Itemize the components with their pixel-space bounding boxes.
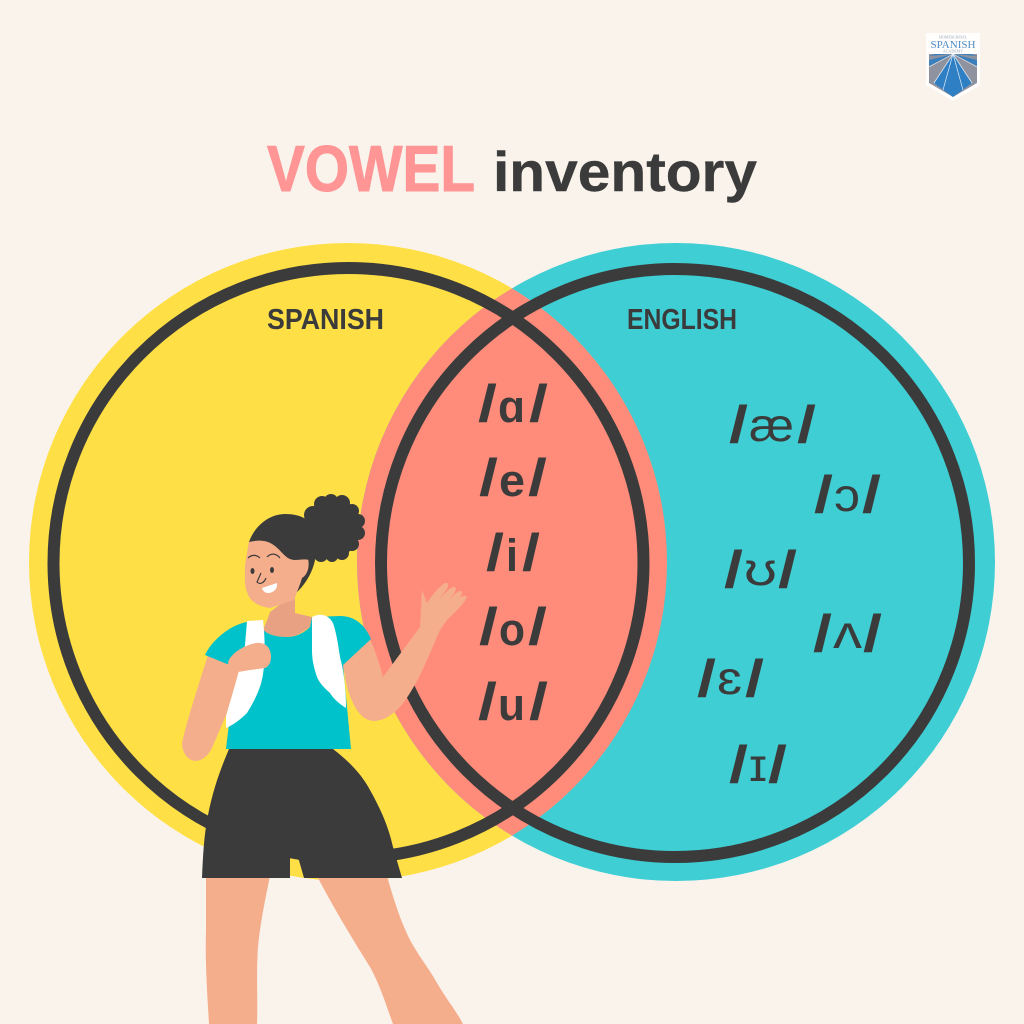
hair strand bbox=[295, 550, 315, 594]
vowel upsilon: ʊ bbox=[744, 543, 777, 595]
vowel wedge bbox=[813, 605, 882, 663]
english vowels bbox=[697, 396, 882, 794]
left arm bbox=[222, 660, 246, 720]
vowel open o: ɔ bbox=[834, 469, 860, 521]
logo: HOMESCHOOL bbox=[939, 34, 967, 40]
vowel small capital i: ɪ bbox=[749, 739, 767, 791]
smile bbox=[262, 583, 277, 593]
vowel i bbox=[486, 524, 540, 582]
vowel u bbox=[478, 673, 548, 731]
vowel small capital i bbox=[729, 736, 787, 794]
vowel u: u bbox=[498, 679, 525, 730]
vowel i: / bbox=[522, 524, 540, 582]
vowel ae bbox=[729, 396, 816, 454]
vowel epsilon: / bbox=[745, 650, 764, 708]
vowel a: ɑ bbox=[498, 381, 525, 432]
label: spanish: SPANISH bbox=[267, 304, 384, 336]
logo: SPANISH bbox=[930, 40, 976, 51]
title bbox=[267, 132, 757, 205]
logo bbox=[926, 33, 980, 101]
eyebrows bbox=[248, 554, 280, 558]
vowel open o: / bbox=[814, 466, 833, 524]
vowel e bbox=[479, 449, 547, 507]
title: VOWEL bbox=[267, 132, 475, 205]
vowel open o bbox=[814, 466, 881, 524]
vowel epsilon: ɛ bbox=[717, 652, 742, 704]
circle: spanish bbox=[29, 243, 667, 881]
right arm bbox=[335, 583, 467, 721]
title: inventory bbox=[493, 140, 757, 203]
vowel a: / bbox=[478, 375, 497, 433]
vowel epsilon bbox=[697, 650, 764, 708]
vowel ae: æ bbox=[749, 399, 794, 451]
vowel o: / bbox=[528, 598, 547, 656]
white straps bbox=[226, 620, 265, 728]
left arm under sleeve bbox=[182, 650, 245, 761]
vowel upsilon: / bbox=[724, 541, 743, 599]
ring: spanish bbox=[54, 268, 644, 858]
shorts bbox=[202, 749, 402, 878]
vowel wedge: / bbox=[863, 605, 882, 663]
logo: ACADEMY bbox=[943, 48, 963, 54]
shirt bbox=[205, 616, 371, 749]
vowel u: / bbox=[478, 673, 497, 731]
shared vowels bbox=[478, 375, 548, 731]
vowel o: o bbox=[499, 604, 525, 655]
vowel upsilon: / bbox=[778, 541, 797, 599]
legs bbox=[206, 876, 270, 1024]
fist bbox=[228, 643, 271, 673]
vowel epsilon: / bbox=[697, 650, 716, 708]
vowel small capital i: / bbox=[729, 736, 748, 794]
vowel i: / bbox=[486, 524, 504, 582]
vowel a: / bbox=[529, 375, 548, 433]
vowel e: / bbox=[528, 449, 547, 507]
vowel upsilon bbox=[724, 541, 797, 599]
vowel o: / bbox=[479, 598, 498, 656]
vowel ae: / bbox=[729, 396, 748, 454]
vowel o bbox=[479, 598, 547, 656]
circle: english bbox=[357, 243, 995, 881]
vowel i: i bbox=[506, 530, 518, 581]
vowel ae: / bbox=[797, 396, 816, 454]
hair bbox=[249, 494, 365, 562]
nose bbox=[257, 573, 266, 583]
vowel wedge: ʌ bbox=[833, 606, 862, 658]
vowel small capital i: / bbox=[768, 736, 787, 794]
vowel e: e bbox=[499, 455, 525, 506]
vowel u: / bbox=[529, 673, 548, 731]
ring: english bbox=[381, 269, 969, 857]
overlap bbox=[357, 288, 667, 836]
vowel wedge: / bbox=[813, 605, 832, 663]
figure: woman bbox=[182, 494, 467, 1024]
neck bbox=[263, 593, 312, 637]
venn diagram bbox=[29, 243, 995, 881]
eyes bbox=[250, 567, 274, 574]
vowel a bbox=[478, 375, 548, 433]
vowel open o: / bbox=[862, 466, 881, 524]
label: english: ENGLISH bbox=[627, 304, 737, 336]
vowel e: / bbox=[479, 449, 498, 507]
face bbox=[245, 540, 309, 608]
